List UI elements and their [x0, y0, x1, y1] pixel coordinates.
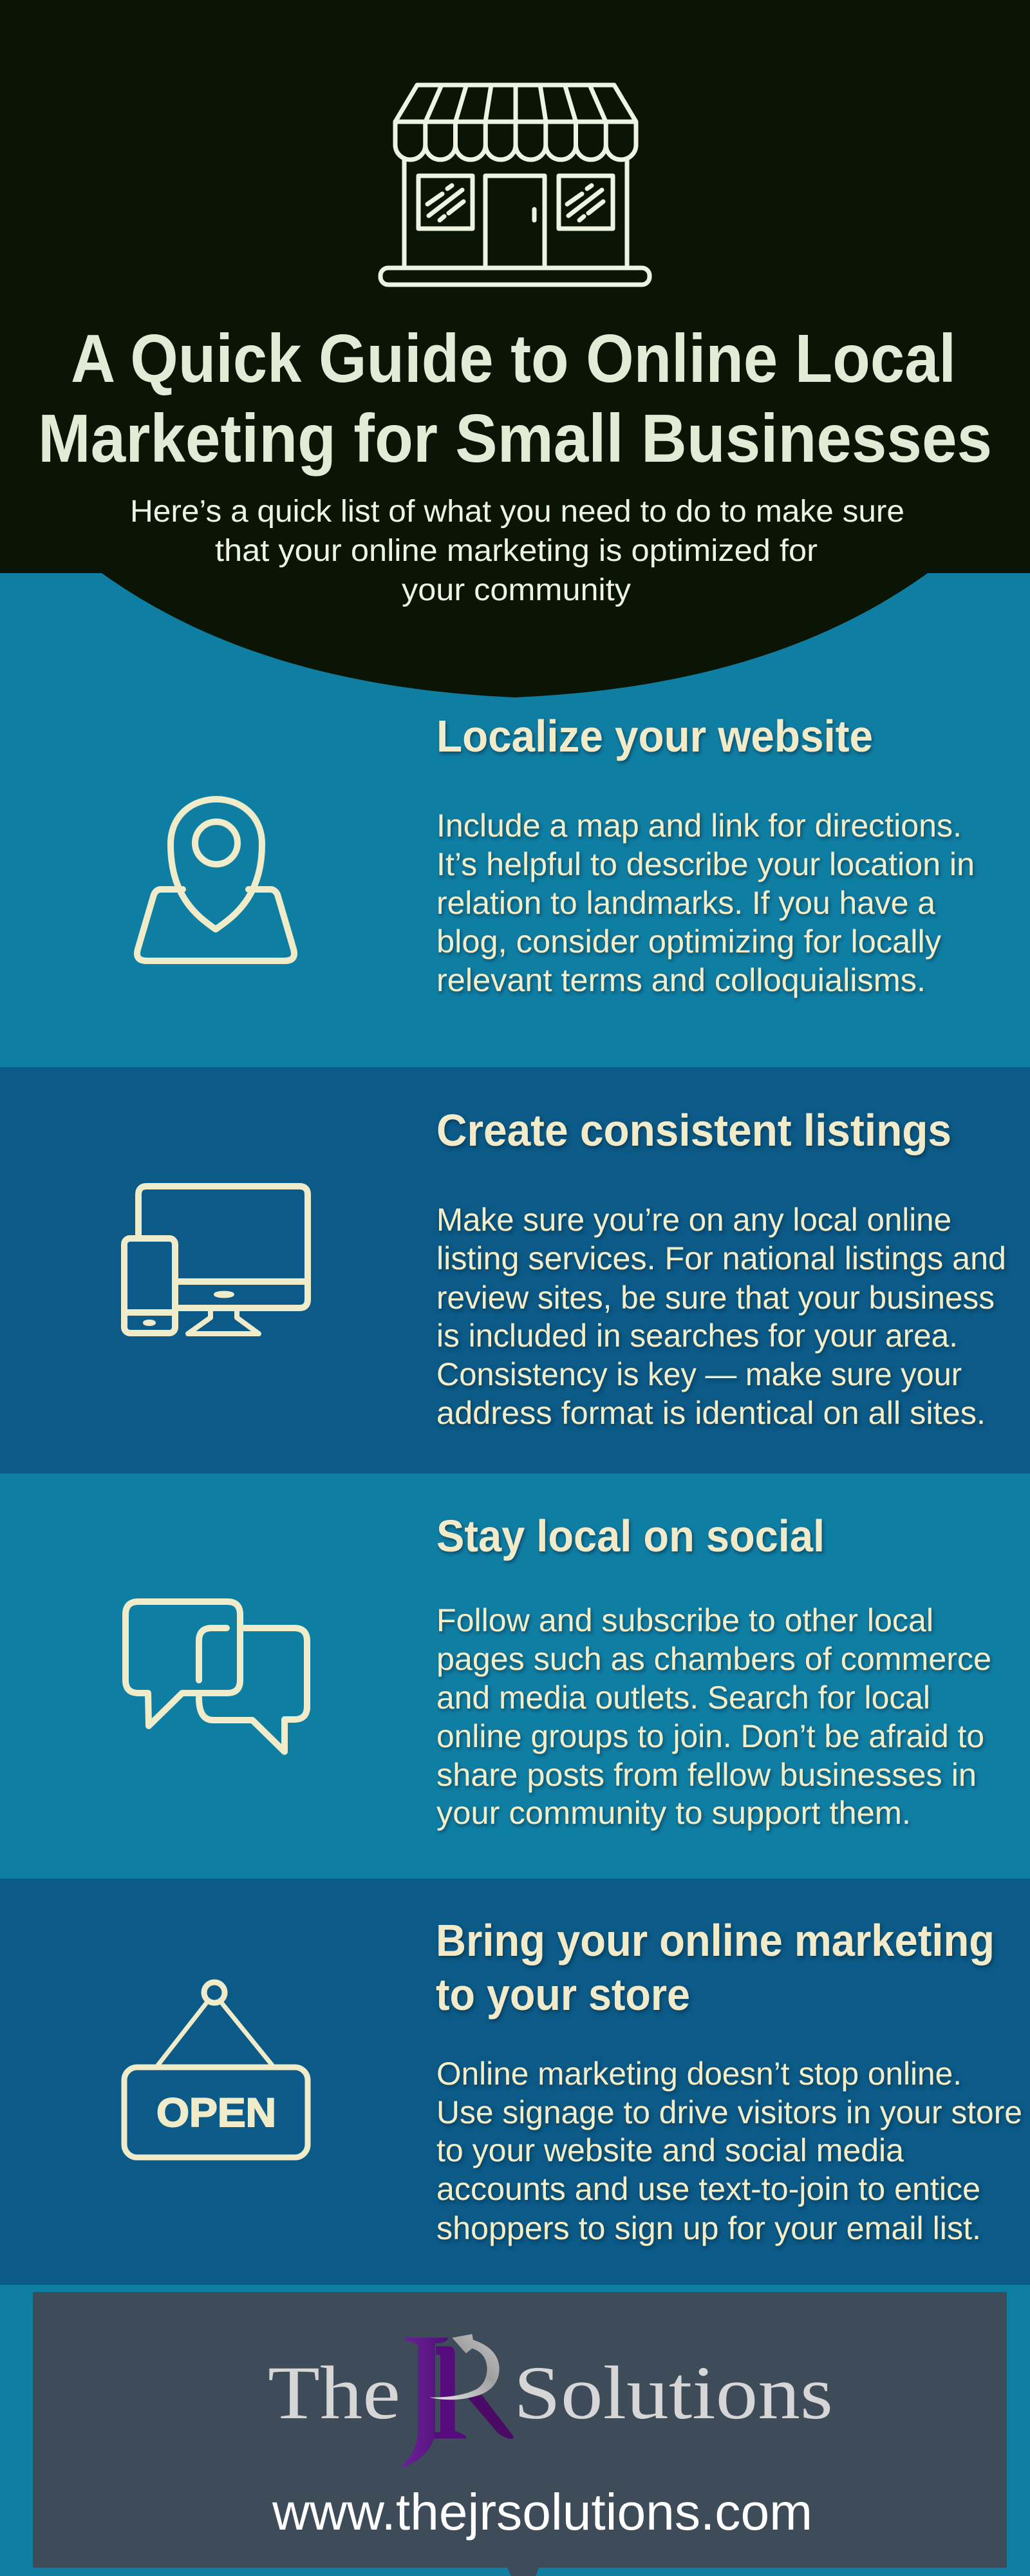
awning roof — [395, 85, 636, 122]
text: stay local on social: Follow and subscribe to other local — [436, 1602, 933, 1638]
text: localize your website: It’s helpful to describe your location in — [436, 846, 975, 882]
text: localize your website: blog, consider optimizing for locally — [436, 923, 941, 960]
arrow: footer tail — [507, 2568, 539, 2576]
website url: www.thejrsolutions.com — [272, 2483, 812, 2541]
text: stay local on social: online groups to join. Don’t be afraid to — [436, 1718, 984, 1754]
icon: devices — [124, 1186, 308, 1334]
text: bring your online marketing to your store — [436, 2056, 1022, 2246]
text: stay local on social: your community to support them. — [436, 1795, 911, 1831]
title — [38, 321, 992, 477]
heading: bring your online marketing to your store — [436, 1915, 995, 2020]
text: localize your website: relevant terms and colloquialisms. — [436, 962, 926, 998]
icon: speech bubbles — [126, 1602, 307, 1752]
icon: open sign — [124, 1982, 308, 2157]
logo mark: JR monogram — [402, 2334, 514, 2468]
text: bring your online marketing to your store: Online marketing doesn’t stop online. — [436, 2056, 962, 2092]
title: A Quick Guide to Online Local — [71, 321, 956, 397]
text: bring your online marketing to your store: shoppers to sign up for your email list. — [436, 2210, 981, 2246]
text: stay local on social: and media outlets. Search for local — [436, 1680, 930, 1716]
text: localize your website: relation to landmarks. If you have a — [436, 885, 935, 921]
text: bring your online marketing to your store: Use signage to drive visitors in your store — [436, 2094, 1022, 2130]
subtitle — [130, 495, 904, 607]
window glints — [427, 185, 603, 220]
text: create consistent listings: Make sure you’re on any local online — [436, 1202, 951, 1238]
icon: storefront — [380, 85, 650, 285]
sign label: OPEN — [156, 2090, 276, 2136]
heading: bring your online marketing to your store: Bring your online marketing — [436, 1915, 995, 1965]
text: stay local on social — [436, 1602, 991, 1831]
panel: bring online marketing background — [0, 1879, 1030, 2285]
doorstep — [380, 268, 650, 285]
text: stay local on social: share posts from fellow businesses in — [436, 1757, 977, 1793]
awning scallops — [395, 122, 636, 160]
sign outline — [124, 1982, 308, 2157]
heading: create consistent listings: Create consistent listings — [436, 1105, 951, 1155]
logo: The JR Solutions — [268, 2334, 833, 2468]
door handle — [532, 209, 537, 220]
right window — [559, 176, 613, 229]
text: create consistent listings: review sites, be sure that your business — [436, 1280, 995, 1316]
logo text: The: The — [268, 2351, 400, 2435]
panel: footer — [33, 2292, 1007, 2568]
text: stay local on social: pages such as chambers of commerce — [436, 1641, 991, 1677]
text: create consistent listings: Consistency is key — make sure your — [436, 1356, 962, 1392]
heading: bring your online marketing to your store: to your store — [436, 1969, 690, 2020]
text: create consistent listings: is included in searches for your area. — [436, 1318, 958, 1354]
text: bring your online marketing to your store: to your website and social media — [436, 2132, 904, 2168]
door — [485, 176, 545, 267]
text: create consistent listings — [436, 1202, 1006, 1431]
heading: localize your website: Localize your website — [436, 711, 873, 761]
icon: map pin — [137, 799, 294, 961]
text: localize your website — [436, 808, 975, 998]
text: bring your online marketing to your store: accounts and use text-to-join to entice — [436, 2171, 980, 2207]
logo text: Solutions: Solutions — [514, 2351, 833, 2435]
text: localize your website: Include a map and link for directions. — [436, 808, 962, 844]
heading: stay local on social: Stay local on social — [436, 1511, 825, 1561]
subtitle: Here’s a quick list of what you need to do to make sure — [130, 495, 904, 529]
left window — [418, 176, 473, 229]
subtitle: your community — [402, 573, 631, 607]
text: create consistent listings: address format is identical on all sites. — [436, 1395, 986, 1431]
building walls — [404, 158, 627, 267]
panel: dark header with curved bottom — [0, 0, 1030, 697]
text: create consistent listings: listing services. For national listings and — [436, 1240, 1006, 1276]
subtitle: that your online marketing is optimized for — [215, 534, 818, 568]
panel: create consistent listings background — [0, 1067, 1030, 1473]
